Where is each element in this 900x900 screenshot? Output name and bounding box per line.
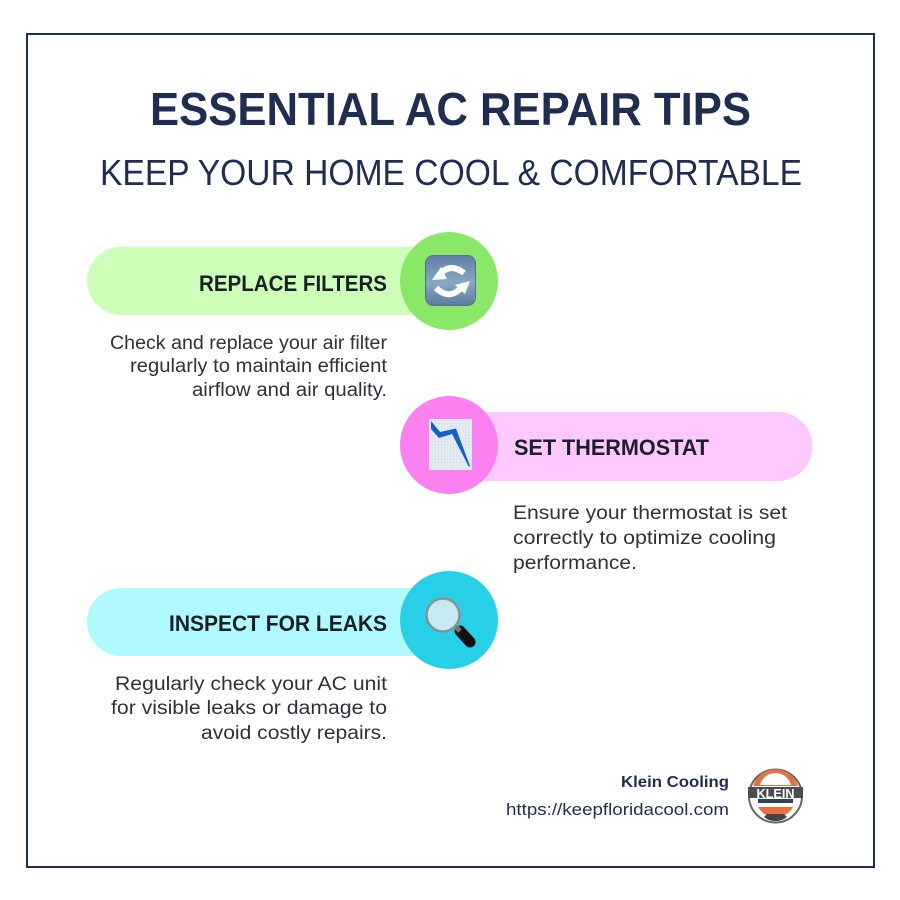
banner: replace filters [87, 247, 450, 315]
text: replace filters description: airflow and air quality. [192, 380, 387, 401]
text: inspect for leaks description: Regularly check your AC unit [115, 674, 388, 695]
text: set thermostat description: correctly to optimize cooling [513, 528, 776, 549]
text: replace filters description [110, 333, 388, 401]
text: inspect for leaks description: for visible leaks or damage to [111, 698, 387, 719]
panel: inspect for leaks [87, 571, 498, 744]
icon: magnifying glass [426, 598, 470, 642]
text: set thermostat description: Ensure your thermostat is set [513, 503, 788, 524]
text: set thermostat description [513, 503, 788, 574]
banner: inspect for leaks [87, 588, 450, 656]
heading: replace filters: REPLACE FILTERS [199, 271, 387, 296]
icon: falling chart [429, 419, 472, 470]
icon circle: replace filters [400, 232, 498, 330]
icon circle: inspect for leaks [400, 571, 498, 669]
text: inspect for leaks description [111, 674, 388, 744]
website url: https://keepfloridacool.com [506, 800, 729, 819]
text: inspect for leaks description: avoid costly repairs. [201, 723, 387, 744]
banner: set thermostat [450, 412, 813, 481]
text: replace filters description: regularly to maintain efficient [130, 356, 388, 377]
text: set thermostat description: performance. [513, 553, 637, 574]
panel: replace filters [87, 232, 498, 401]
heading: set thermostat: SET THERMOSTAT [514, 435, 710, 460]
footer: brand [506, 769, 803, 822]
text: replace filters description: Check and replace your air filter [110, 333, 388, 354]
panel: set thermostat [400, 396, 813, 574]
icon: refresh arrows [426, 256, 476, 306]
logo: Klein Cooling badge: KLEIN [756, 786, 794, 801]
subtitle: KEEP YOUR HOME COOL & COMFORTABLE [100, 152, 802, 193]
title: ESSENTIAL AC REPAIR TIPS [150, 83, 751, 135]
logo: Klein Cooling badge [748, 769, 803, 822]
heading: inspect for leaks: INSPECT FOR LEAKS [169, 611, 387, 636]
icon circle: set thermostat [400, 396, 498, 494]
brand name: Klein Cooling [621, 774, 729, 791]
